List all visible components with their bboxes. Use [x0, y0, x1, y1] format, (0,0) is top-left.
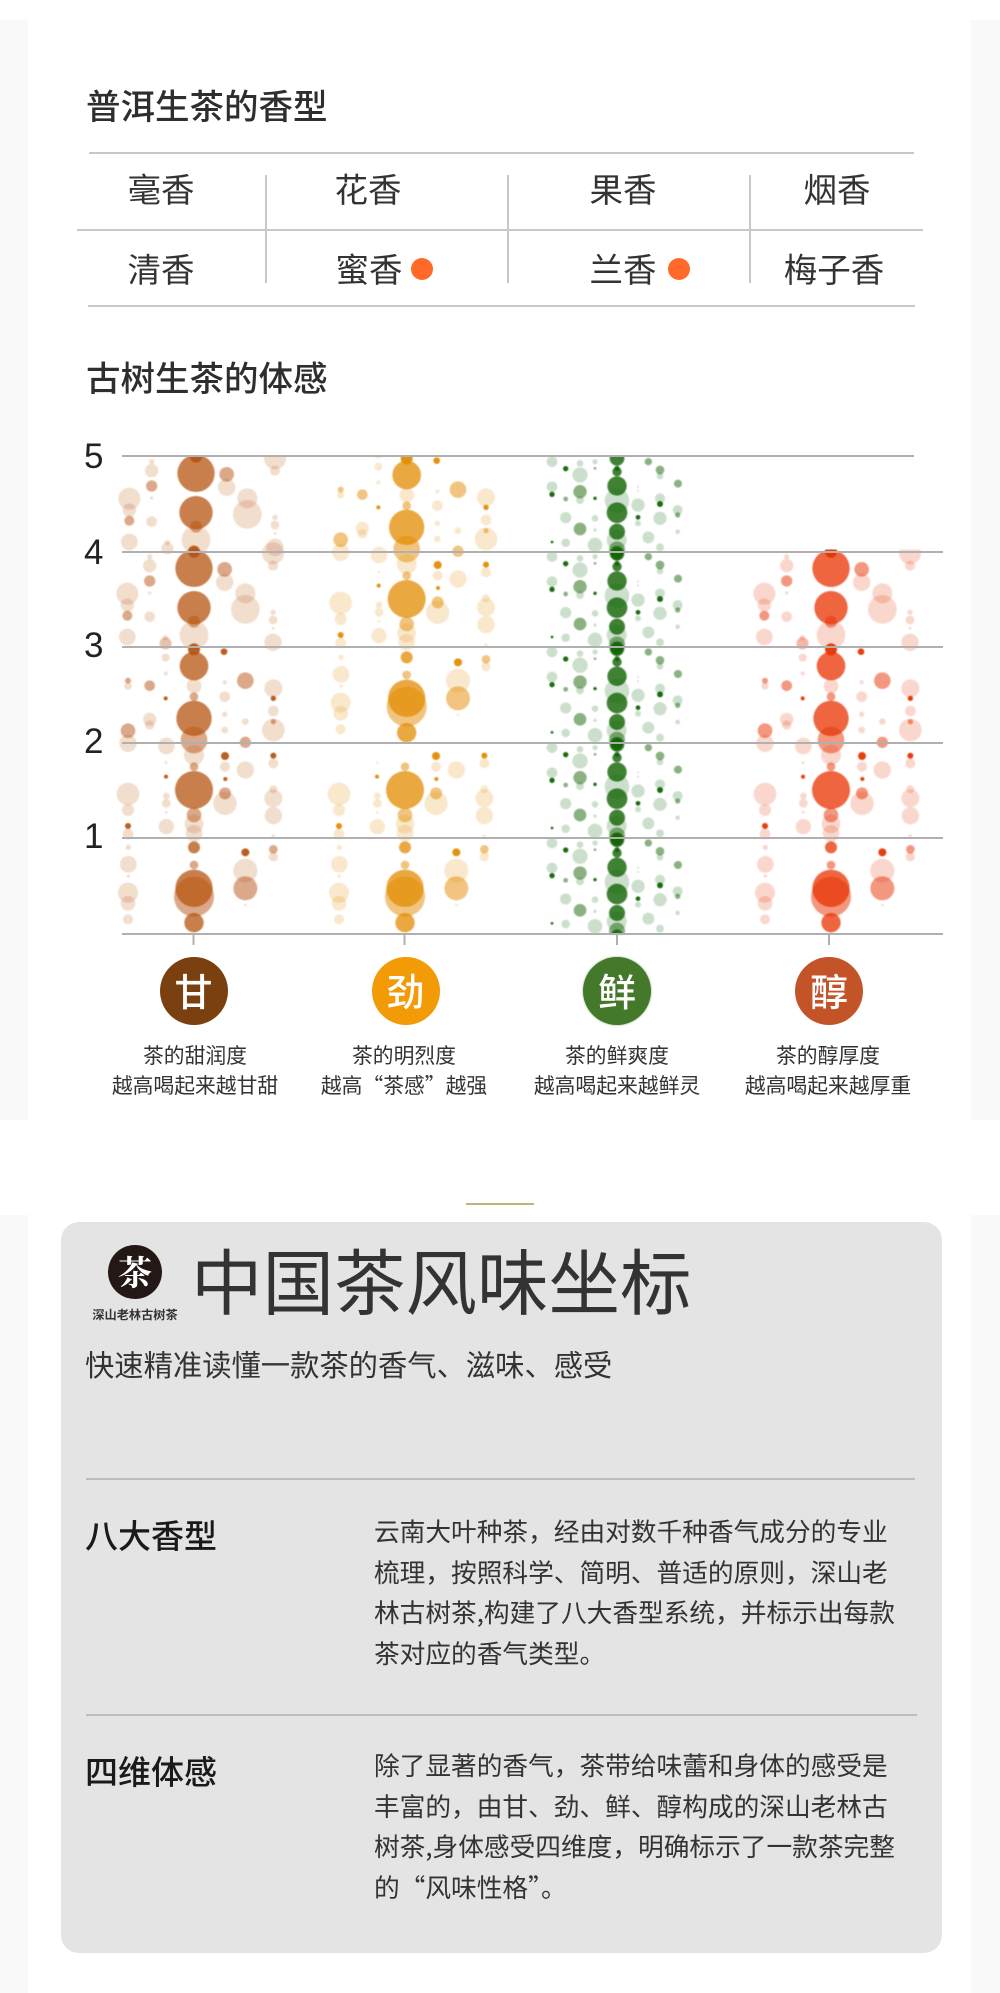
bubbles: 甘 column	[116, 447, 286, 932]
caption: 甘: 茶的甜润度	[143, 1039, 247, 1069]
icon: 鲜 badge: 鲜	[598, 962, 636, 1017]
panel: flavour coordinates	[61, 1222, 942, 1953]
section text: aroma: 云南大叶种茶，经由对数千种香气成分的专业	[374, 1512, 888, 1549]
panel title: 中国茶风味坐标	[191, 1226, 692, 1330]
section text: body feel: 除了显著的香气，茶带给味蕾和身体的感受是	[374, 1746, 888, 1783]
icon: 鲜 badge	[583, 957, 651, 1025]
divider line 1	[86, 1478, 915, 1480]
section text: body feel	[374, 1746, 895, 1905]
panel: aroma table: 毫香	[128, 163, 194, 212]
caption: 劲	[321, 1039, 487, 1099]
caption: 劲: 茶的明烈度	[352, 1039, 456, 1069]
section text: body feel: 树茶,身体感受四维度，明确标示了一款茶完整	[374, 1827, 895, 1864]
axis numbers: 3	[84, 626, 103, 665]
caption: 甘	[112, 1039, 278, 1099]
icon: 劲 badge	[372, 957, 440, 1025]
caption: 鲜	[534, 1039, 700, 1099]
section text: body feel: 丰富的，由甘、劲、鲜、醇构成的深山老林古	[374, 1787, 888, 1824]
chart grid lines and ticks	[122, 456, 943, 945]
panel: aroma table: 清香	[128, 243, 194, 292]
divider line 2	[86, 1714, 917, 1716]
caption: 醇: 越高喝起来越厚重	[745, 1069, 911, 1099]
logo: 茶	[118, 1246, 152, 1295]
caption: 鲜: 茶的鲜爽度	[565, 1039, 669, 1069]
axis numbers: 1	[84, 817, 103, 856]
divider: gold accent	[466, 1203, 534, 1205]
caption: 劲: 越高“茶感”越强	[321, 1069, 487, 1099]
section text: aroma: 林古树茶,构建了八大香型系统，并标示出每款	[374, 1593, 895, 1630]
section text: body feel: 的“风味性格”。	[374, 1868, 567, 1905]
heading: body feel: 古树生茶的体感	[86, 351, 328, 401]
panel: aroma table: 兰香	[590, 243, 656, 292]
section text: aroma: 梳理，按照科学、简明、普适的原则，深山老	[374, 1553, 888, 1590]
bubbles: 鲜 column	[547, 451, 683, 941]
panel: aroma table: 蜜香	[336, 243, 402, 292]
caption: 甘: 越高喝起来越甘甜	[112, 1069, 278, 1099]
icon: 醇 badge	[795, 957, 863, 1025]
section heading: 四维体感: 四维体感	[85, 1746, 217, 1794]
bubbles: 醇 column	[753, 542, 922, 932]
axis numbers: 5	[84, 437, 103, 476]
panel: aroma table: 烟香	[804, 163, 870, 212]
icon: 醇 badge: 醇	[810, 962, 848, 1017]
icon: 甘 badge: 甘	[174, 962, 212, 1017]
icon: 甘 badge	[160, 957, 228, 1025]
axis numbers	[84, 437, 103, 856]
caption: 醇	[745, 1039, 911, 1099]
section heading: 八大香型: 八大香型	[85, 1510, 217, 1558]
icon: 劲 badge: 劲	[386, 962, 424, 1017]
panel subtitle: 快速精准读懂一款茶的香气、滋味、感受	[85, 1343, 612, 1385]
panel: aroma table: 梅子香	[784, 243, 884, 292]
chart: bubble columns	[116, 455, 943, 1024]
logo	[92, 1245, 178, 1323]
section text: aroma: 茶对应的香气类型。	[374, 1634, 605, 1671]
logo: 深山老林古树茶	[92, 1305, 178, 1323]
axis numbers: 4	[84, 533, 103, 572]
axis numbers: 2	[84, 722, 103, 761]
caption: 醇: 茶的醇厚度	[776, 1039, 880, 1069]
section text: aroma	[374, 1512, 895, 1671]
bubbles: 劲 column	[328, 446, 497, 932]
caption: 鲜: 越高喝起来越鲜灵	[534, 1069, 700, 1099]
panel: aroma table	[77, 152, 923, 307]
heading: aroma types: 普洱生茶的香型	[86, 79, 328, 129]
panel: aroma table: 果香	[590, 163, 656, 212]
panel: aroma table: 花香	[334, 163, 402, 212]
